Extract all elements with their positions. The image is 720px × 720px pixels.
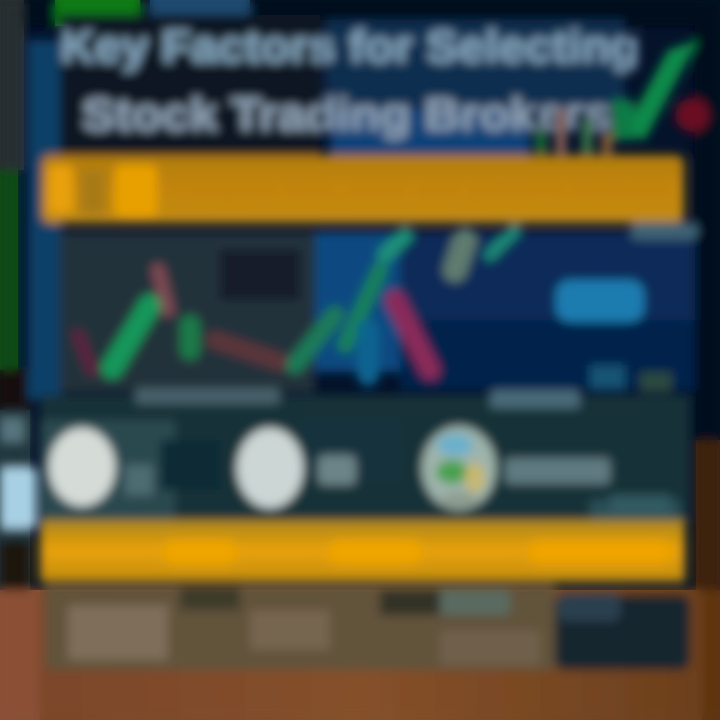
banner item 2 [330, 540, 420, 564]
left chart rising green [112, 305, 150, 368]
banner item 3 [530, 540, 670, 564]
icon: banner bullet right [115, 165, 157, 217]
broker 2 label [318, 455, 356, 485]
icon: blue button on chart [556, 280, 644, 322]
icon: left clipped device [0, 418, 36, 528]
center chart rising green [295, 315, 335, 365]
caption right blue block [590, 365, 625, 390]
chart captions [135, 365, 672, 408]
icon: banner dark tick [80, 170, 106, 214]
card 1 [68, 605, 168, 660]
icon: banner bullet left [48, 165, 73, 213]
broker 1 label [125, 465, 153, 495]
card 3 [440, 630, 540, 665]
chart panel: dark left and blue right [60, 232, 695, 392]
title line 2: Stock Trading Brokers [82, 89, 612, 140]
caption right [490, 390, 580, 408]
panel: lower amber banner [40, 520, 685, 582]
icon: glowing corner below banner [630, 222, 698, 240]
icon: multicolor broker logo 3 [422, 426, 496, 510]
card 2 [250, 610, 330, 650]
left chart red low [78, 335, 92, 370]
left chart red spike [158, 270, 168, 310]
panel: title backdrop [60, 15, 625, 155]
center chart blue [357, 330, 379, 375]
title line 1: Key Factors for Selecting [60, 21, 640, 72]
bottom card text blocks [68, 590, 540, 665]
icon: green check mark and candles [536, 40, 709, 154]
broker 3 label [505, 458, 670, 515]
icon: white broker logo 2 [237, 428, 303, 508]
title [60, 21, 640, 140]
banner text: Compare fees, tools and platform features [170, 177, 670, 204]
line chart: candlestick trend [78, 230, 515, 375]
icon: white broker logo 1 [49, 428, 115, 506]
left chart falling red [215, 340, 280, 362]
panel: bottom translucent cards [45, 585, 555, 670]
panel: broker logos row [40, 395, 690, 520]
center chart magenta fall [395, 300, 430, 370]
left chart small green [180, 325, 200, 350]
caption right olive block [640, 372, 672, 392]
panel: top amber banner [42, 155, 684, 223]
caption left [135, 388, 280, 404]
panel: dark bottom-right card [555, 593, 690, 670]
banner item 1 [165, 540, 235, 564]
right chart blend [455, 240, 465, 270]
